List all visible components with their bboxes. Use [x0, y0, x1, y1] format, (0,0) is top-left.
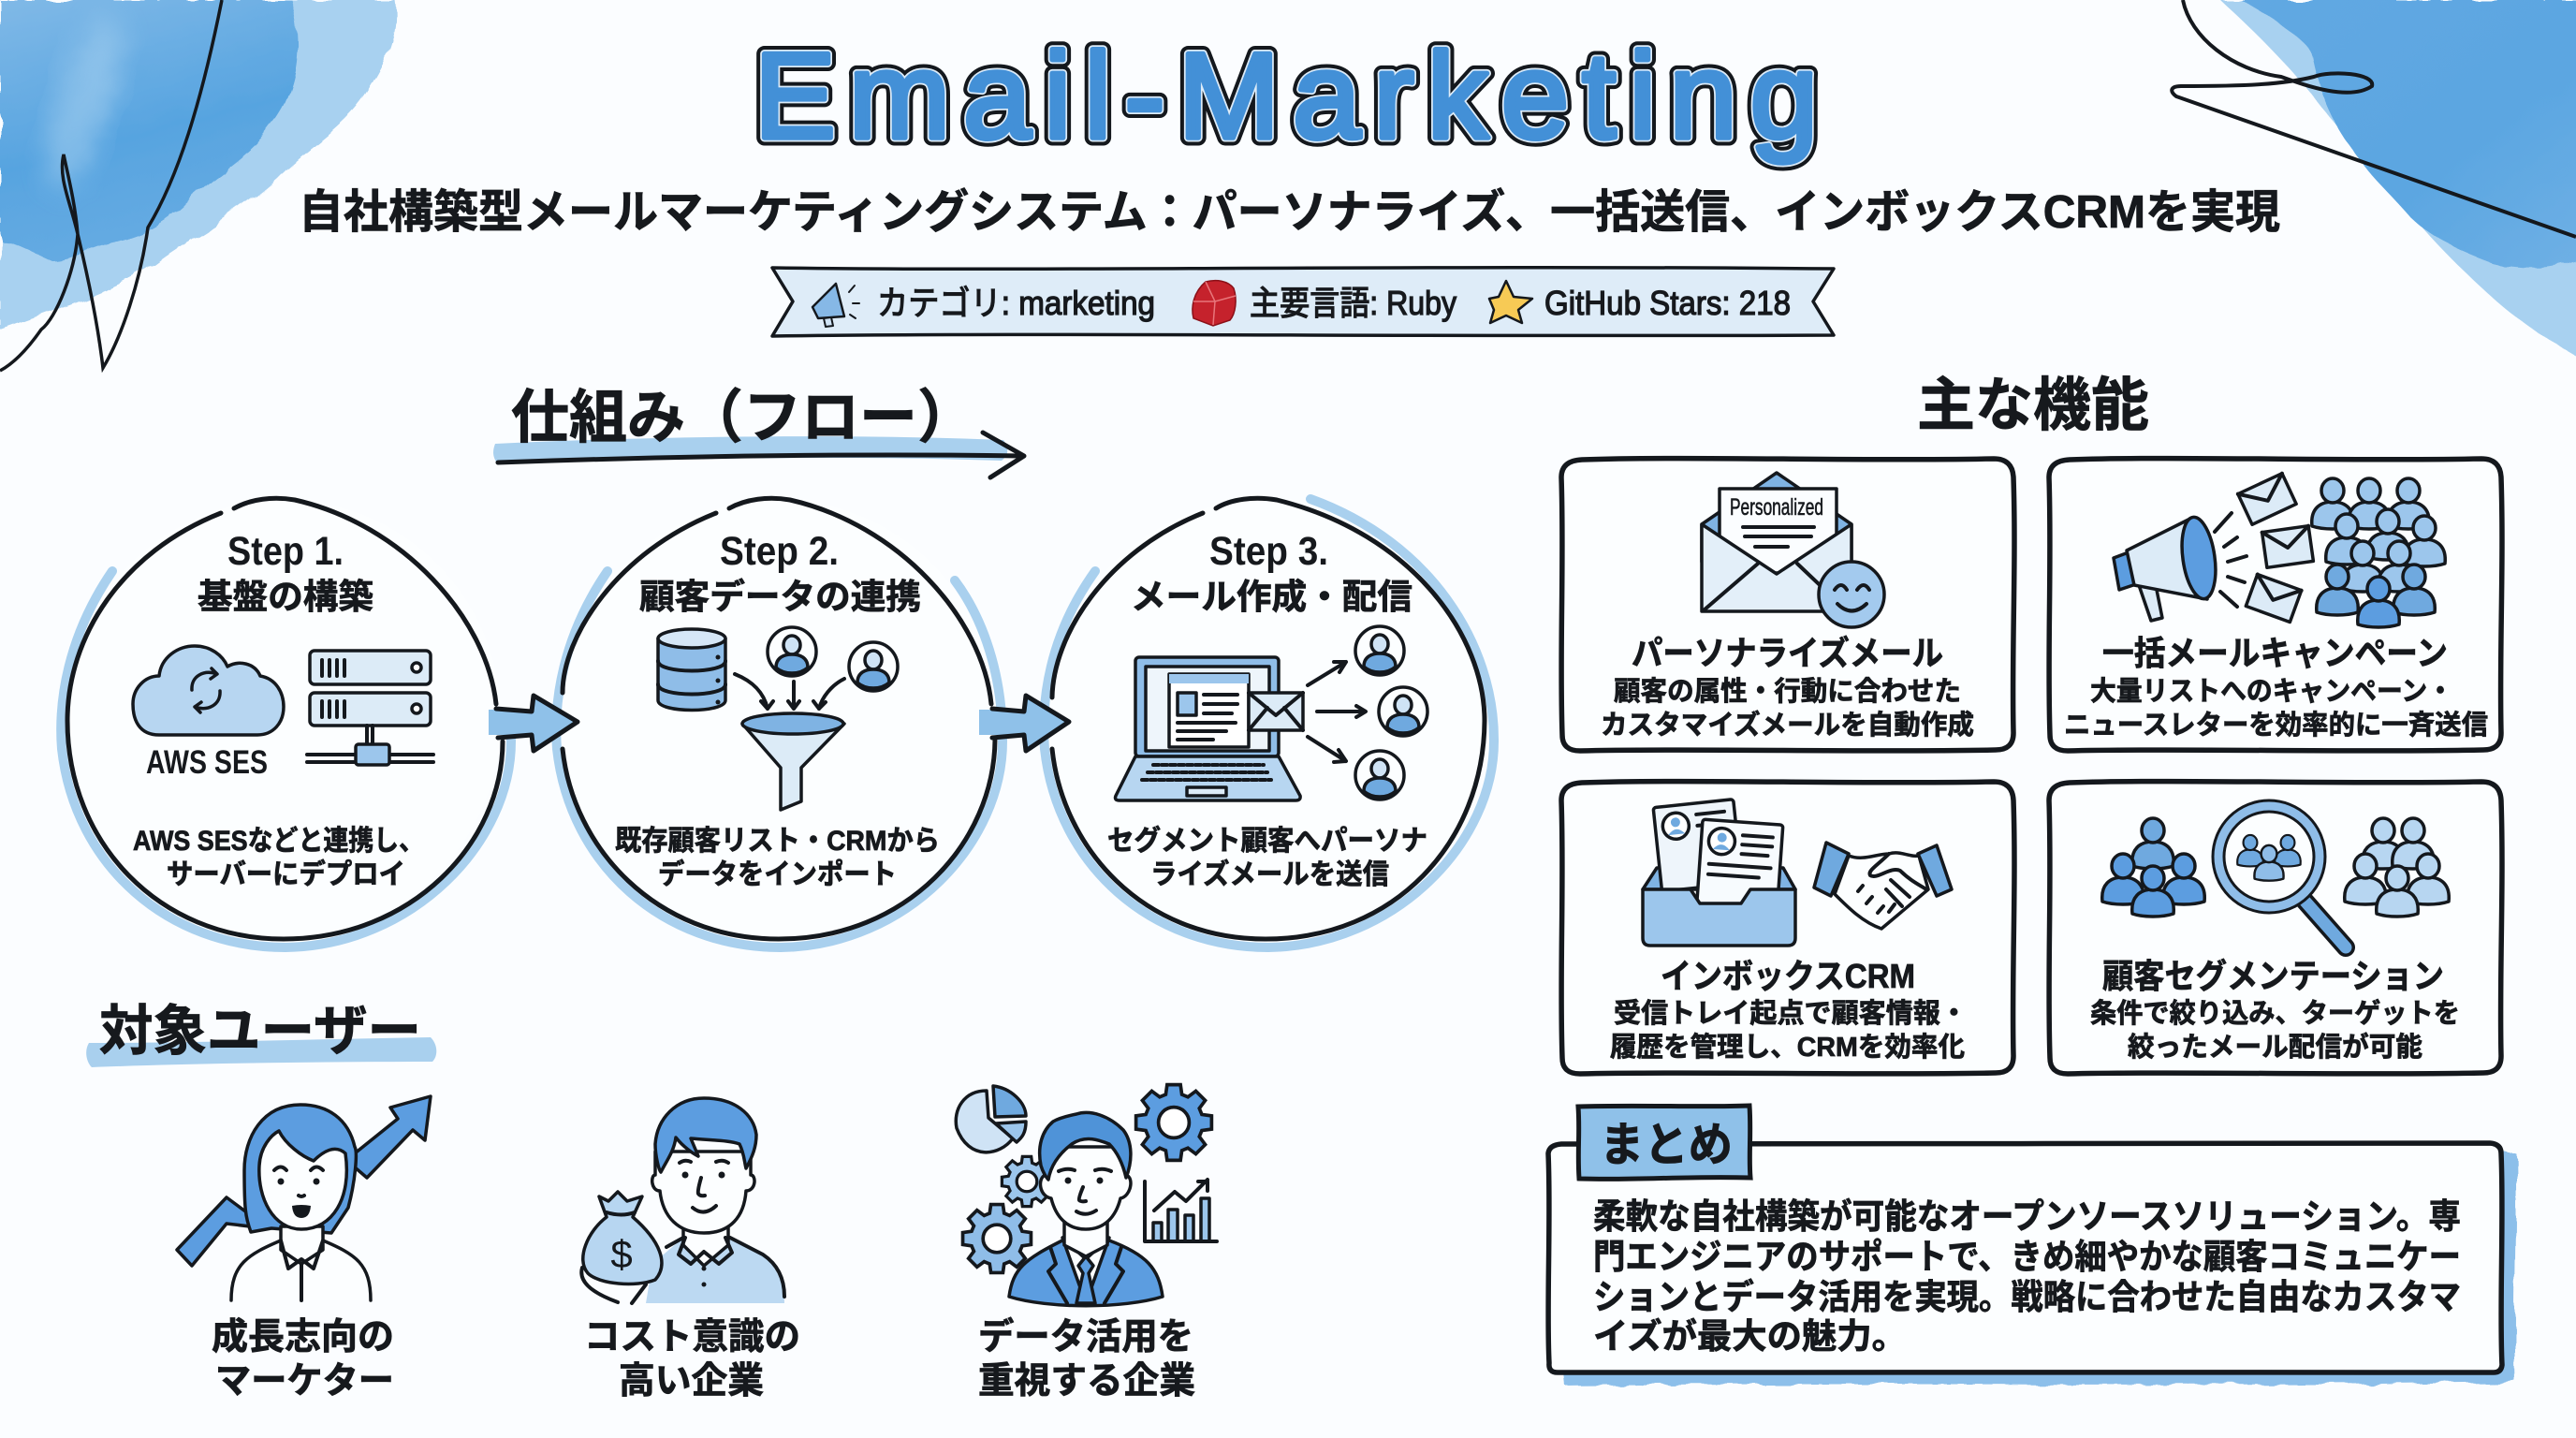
- icon: audience crowd: [2312, 478, 2445, 627]
- summary text: ションとデータ活用を実現。戦略に合わせた自由なカスタマ: [1593, 1277, 2461, 1316]
- card description: [2064, 676, 2488, 741]
- summary text: 門エンジニアのサポートで、きめ細やかな顧客コミュニケー: [1593, 1237, 2461, 1276]
- illustration: gears: [963, 1085, 1211, 1272]
- metadata ribbon: [772, 268, 1834, 336]
- card title: 一括メールキャンペーン: [2102, 634, 2448, 672]
- icon: envelope with letter and smile: Personalized: [1730, 494, 1823, 521]
- persona label: [978, 1316, 1195, 1401]
- persona: growth-oriented marketer: [177, 1096, 431, 1401]
- card description: 受信トレイ起点で顧客情報・: [1614, 998, 1968, 1029]
- illustration: woman: [231, 1105, 371, 1300]
- summary tab: まとめ: [1600, 1119, 1733, 1171]
- illustration: man with money bag: $: [610, 1232, 633, 1276]
- section heading: target users: 対象ユーザー: [99, 1001, 421, 1062]
- step description: セグメント顧客へパーソナ: [1107, 826, 1427, 857]
- icon: inbox tray with documents: [1643, 800, 1795, 946]
- decorative pen line: top right: [2172, 0, 2576, 237]
- persona: data-driven company: [956, 1085, 1217, 1401]
- icon: envelope with letter and smile: [1702, 473, 1884, 627]
- step circle 1: infrastructure: [61, 498, 511, 947]
- persona label: [584, 1317, 800, 1401]
- persona label: [212, 1317, 394, 1401]
- arrows to recipients: [1308, 662, 1366, 762]
- watercolor splash: top left: [0, 0, 396, 330]
- card title: インボックスCRM: [1661, 957, 1915, 995]
- decorative pen line: top left: [0, 0, 222, 371]
- persona label: コスト意識の: [584, 1317, 800, 1357]
- illustration: businessman: [1009, 1112, 1163, 1306]
- icon: servers: [307, 651, 433, 765]
- icon: database: [658, 629, 725, 710]
- ribbon label: language: 主要言語: Ruby: [1250, 284, 1456, 322]
- feature card: bulk campaign: [2049, 459, 2502, 751]
- card description: 条件で絞り込み、ターゲットを: [2090, 998, 2460, 1029]
- summary text: [1593, 1196, 2461, 1356]
- illustration: pie chart: [956, 1086, 1026, 1152]
- icon: ruby gem: [1193, 281, 1236, 326]
- illustration: man with money bag: [581, 1098, 784, 1303]
- step circle 3: send mail: [1044, 498, 1494, 947]
- label: AWS SES: AWS SES: [146, 744, 268, 781]
- card description: ニュースレターを効率的に一斉送信: [2064, 710, 2488, 741]
- icon: funnel: [742, 713, 844, 810]
- step description: ライズメールを送信: [1150, 858, 1389, 890]
- icon: handshake: [1814, 843, 1952, 929]
- card title: 顧客セグメンテーション: [2102, 957, 2444, 995]
- summary text: 柔軟な自社構築が可能なオープンソースソリューション。専: [1593, 1196, 2461, 1236]
- icon: customers: [768, 627, 898, 691]
- persona label: 重視する企業: [978, 1361, 1195, 1401]
- icon: magnifier: [2218, 806, 2346, 947]
- arrow: step 1 to step 2: [489, 696, 578, 751]
- step description: [133, 826, 424, 890]
- feature card: personalized mail: [1561, 459, 2014, 751]
- arrows into funnel: [735, 674, 844, 709]
- step description: データをインポート: [658, 858, 897, 890]
- section heading: flow: 仕組み（フロー）: [511, 386, 975, 450]
- step circle 2: data integration: [556, 498, 1003, 947]
- icon: megaphone: [812, 284, 859, 327]
- step heading: Step 3.: [1209, 529, 1328, 574]
- step heading: Step 2.: [720, 529, 839, 574]
- step title: 顧客データの連携: [639, 577, 921, 616]
- step description: [615, 826, 940, 890]
- step description: [1107, 826, 1427, 890]
- title: Email-Marketing: [754, 27, 1818, 164]
- summary tab: [1578, 1106, 1750, 1179]
- arrow: step 2 to step 3: [979, 696, 1069, 751]
- persona: cost-conscious company: [581, 1098, 800, 1401]
- feature card: inbox CRM: [1561, 782, 2014, 1074]
- step description: AWS SESなどと連携し、: [133, 826, 424, 857]
- icon: megaphone: [2114, 513, 2247, 621]
- icon: star: [1489, 281, 1532, 323]
- ribbon label: github stars: GitHub Stars: 218: [1544, 284, 1791, 322]
- ribbon label: category: カテゴリ: marketing: [877, 284, 1155, 322]
- icon: cloud: [133, 646, 284, 735]
- section heading: flow: [493, 386, 1024, 477]
- persona label: データ活用を: [978, 1316, 1193, 1357]
- watercolor splash: top right: [2220, 0, 2576, 360]
- section heading: features: 主な機能: [1917, 374, 2149, 438]
- icon: envelope: [1249, 693, 1303, 730]
- icon: growth arrow: [177, 1096, 431, 1266]
- step heading: Step 1.: [227, 529, 344, 574]
- card description: 顧客の属性・行動に合わせた: [1614, 676, 1961, 707]
- icon: laptop: [1116, 657, 1300, 800]
- card description: 絞ったメール配信が可能: [2128, 1031, 2422, 1063]
- persona label: 高い企業: [619, 1361, 764, 1401]
- title: Email-Marketing: [754, 27, 1818, 164]
- card description: [1601, 676, 1974, 741]
- subtitle: 自社構築型メールマーケティングシステム：パーソナライズ、一括送信、インボックスCRMを実現: [299, 187, 2280, 238]
- card description: [1610, 998, 1968, 1063]
- card description: カスタマイズメールを自動作成: [1601, 709, 1974, 741]
- card title: パーソナライズメール: [1632, 634, 1943, 672]
- step title: 基盤の構築: [198, 578, 373, 616]
- step title: メール作成・配信: [1131, 578, 1412, 616]
- title: Email-Marketing: [754, 27, 1818, 164]
- summary text: イズが最大の魅力。: [1593, 1316, 1907, 1356]
- icon: envelopes: [2238, 474, 2313, 622]
- feature card: customer segmentation: [2049, 782, 2502, 1074]
- step description: 既存顧客リスト・CRMから: [615, 826, 940, 857]
- icon: recipients: [1355, 626, 1427, 800]
- card description: [2090, 998, 2460, 1063]
- icon: customer group: [2102, 818, 2204, 917]
- persona label: 成長志向の: [212, 1317, 394, 1357]
- step description: サーバーにデプロイ: [167, 858, 405, 890]
- persona label: マーケター: [215, 1361, 394, 1401]
- card description: 大量リストへのキャンペーン・: [2090, 676, 2453, 707]
- card description: 履歴を管理し、CRMを効率化: [1610, 1032, 1965, 1063]
- panel: summary: [1548, 1106, 2517, 1386]
- icon: segmented group: [2345, 818, 2449, 917]
- illustration: bar chart: [1145, 1180, 1217, 1241]
